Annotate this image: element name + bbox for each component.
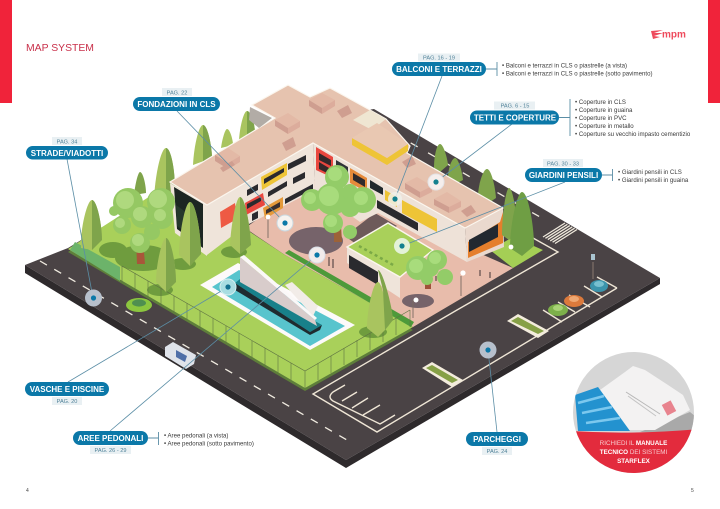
label: tetti e coperture: • Coperture in metallo bbox=[575, 123, 634, 130]
left wing facade bbox=[207, 143, 315, 255]
pin: parcheggi bbox=[480, 342, 496, 358]
label: balconi e terrazzi: BALCONI E TERRAZZI bbox=[396, 65, 482, 74]
roof notches bbox=[249, 107, 272, 128]
page number right: 5 bbox=[691, 488, 694, 494]
label: balconi e terrazzi: PAG. 16 - 19 bbox=[423, 56, 455, 62]
label: vasche e piscine: VASCHE E PISCINE bbox=[30, 385, 105, 394]
leader lines bbox=[67, 76, 565, 432]
isometric site map bbox=[25, 85, 660, 468]
rooftop vents bbox=[220, 105, 476, 217]
label: balconi e terrazzi: • Balconi e terrazzi in CLS o piastrelle (a vista) bbox=[502, 62, 627, 70]
label: giardini pensili: GIARDINI PENSILI bbox=[529, 171, 598, 180]
label: giardini pensili bbox=[525, 159, 689, 184]
yellow roof block bbox=[352, 138, 408, 165]
main lawn bbox=[68, 182, 414, 391]
manual callout circle: TECNICO DEI SISTEMI bbox=[600, 449, 668, 456]
label: strade/viadotti bbox=[26, 137, 108, 160]
manual callout circle bbox=[573, 352, 694, 473]
right wing end bbox=[465, 208, 504, 262]
label: aree pedonali: AREE PEDONALI bbox=[78, 434, 143, 443]
pool bbox=[200, 255, 355, 350]
label: tetti e coperture: PAG. 6 - 15 bbox=[501, 104, 529, 110]
page number left: 4 bbox=[26, 488, 29, 494]
label: vasche e piscine bbox=[25, 382, 109, 405]
label: aree pedonali bbox=[73, 431, 254, 454]
rooftop box 3 bbox=[215, 148, 240, 169]
parking markings bbox=[313, 238, 617, 432]
label: tetti e coperture: • Coperture in guaina bbox=[575, 107, 633, 114]
label: giardini pensili: • Giardini pensili in guaina bbox=[618, 177, 689, 184]
manual callout circle: STARFLEX bbox=[617, 458, 651, 465]
roof bbox=[170, 85, 503, 228]
central round tree bbox=[301, 165, 376, 242]
left round tree bbox=[109, 188, 175, 264]
logo bbox=[651, 30, 686, 40]
right red tab bbox=[708, 0, 720, 103]
left wing end glass bbox=[170, 183, 207, 256]
label: aree pedonali: • Aree pedonali (a vista) bbox=[164, 432, 228, 440]
label: aree pedonali: PAG. 26 - 29 bbox=[95, 448, 126, 454]
label: parcheggi: PARCHEGGI bbox=[473, 435, 521, 444]
logo: mpm bbox=[662, 30, 686, 40]
rooftop box 4 bbox=[405, 177, 432, 198]
title: MAP SYSTEM bbox=[26, 43, 94, 54]
green car bbox=[126, 298, 152, 312]
label: tetti e coperture: • Coperture in CLS bbox=[575, 99, 626, 106]
cypress trees bbox=[81, 188, 534, 337]
right wing windows bbox=[316, 147, 437, 232]
pin: fondazioni bbox=[277, 215, 293, 231]
hedge bbox=[70, 242, 120, 281]
rooftop box 1 bbox=[309, 93, 335, 114]
plaza bbox=[245, 180, 513, 327]
rooftop box 2 bbox=[275, 113, 300, 134]
plaza lamps and people bbox=[266, 215, 513, 318]
label: parcheggi bbox=[466, 432, 528, 455]
label: balconi e terrazzi: • Balconi e terrazzi in CLS o piastrelle (sotto pavimento) bbox=[502, 70, 652, 78]
street lamp bbox=[591, 254, 595, 279]
label: giardini pensili: • Giardini pensili in CLS bbox=[618, 169, 682, 176]
small round tree bbox=[406, 250, 453, 289]
crosswalk bbox=[543, 223, 577, 244]
left wing windows bbox=[220, 155, 313, 228]
label: fondazioni in cls: PAG. 22 bbox=[167, 90, 187, 96]
label: strade/viadotti: STRADE/VIADOTTI bbox=[31, 149, 103, 158]
pin: vasche bbox=[220, 279, 236, 295]
white van bbox=[165, 342, 196, 369]
building bbox=[170, 85, 504, 298]
trees behind building bbox=[134, 111, 496, 204]
label: tetti e coperture bbox=[470, 99, 691, 138]
road base bbox=[25, 109, 660, 468]
left red tab bbox=[0, 0, 12, 103]
label: tetti e coperture: • Coperture in PVC bbox=[575, 115, 627, 122]
pin: tetti bbox=[428, 174, 444, 190]
plaza shadows bbox=[99, 213, 434, 338]
label: giardini pensili: PAG. 30 - 33 bbox=[547, 162, 579, 168]
label: strade/viadotti: PAG. 34 bbox=[57, 140, 77, 146]
label: fondazioni in cls bbox=[133, 88, 220, 111]
road dashes bbox=[40, 123, 540, 443]
fence bbox=[122, 266, 410, 388]
label: tetti e coperture: TETTI E COPERTURE bbox=[474, 114, 557, 122]
pin: strade bbox=[85, 290, 102, 306]
parking islands bbox=[422, 314, 549, 387]
label: parcheggi: PAG. 24 bbox=[487, 449, 507, 455]
label: balconi e terrazzi bbox=[392, 54, 652, 78]
label: vasche e piscine: PAG. 20 bbox=[57, 399, 77, 405]
pin: balconi bbox=[388, 192, 402, 206]
pin: aree pedonali bbox=[309, 247, 325, 263]
label: fondazioni in cls: FONDAZIONI IN CLS bbox=[137, 100, 216, 109]
rooftop box 5 bbox=[434, 192, 461, 213]
monument bbox=[240, 257, 317, 326]
pin: giardini bbox=[394, 238, 410, 254]
green roof annex bbox=[347, 223, 433, 298]
right lawn bbox=[490, 237, 543, 268]
label: aree pedonali: • Aree pedonali (sotto pavimento) bbox=[164, 440, 254, 448]
right wing facade bbox=[313, 143, 467, 262]
label: tetti e coperture: • Coperture su vecchio impasto cementizio bbox=[575, 131, 691, 138]
pin markers bbox=[85, 174, 496, 358]
manual callout circle: RICHIEDI IL MANUALE bbox=[600, 440, 667, 447]
parked cars bbox=[548, 280, 608, 316]
